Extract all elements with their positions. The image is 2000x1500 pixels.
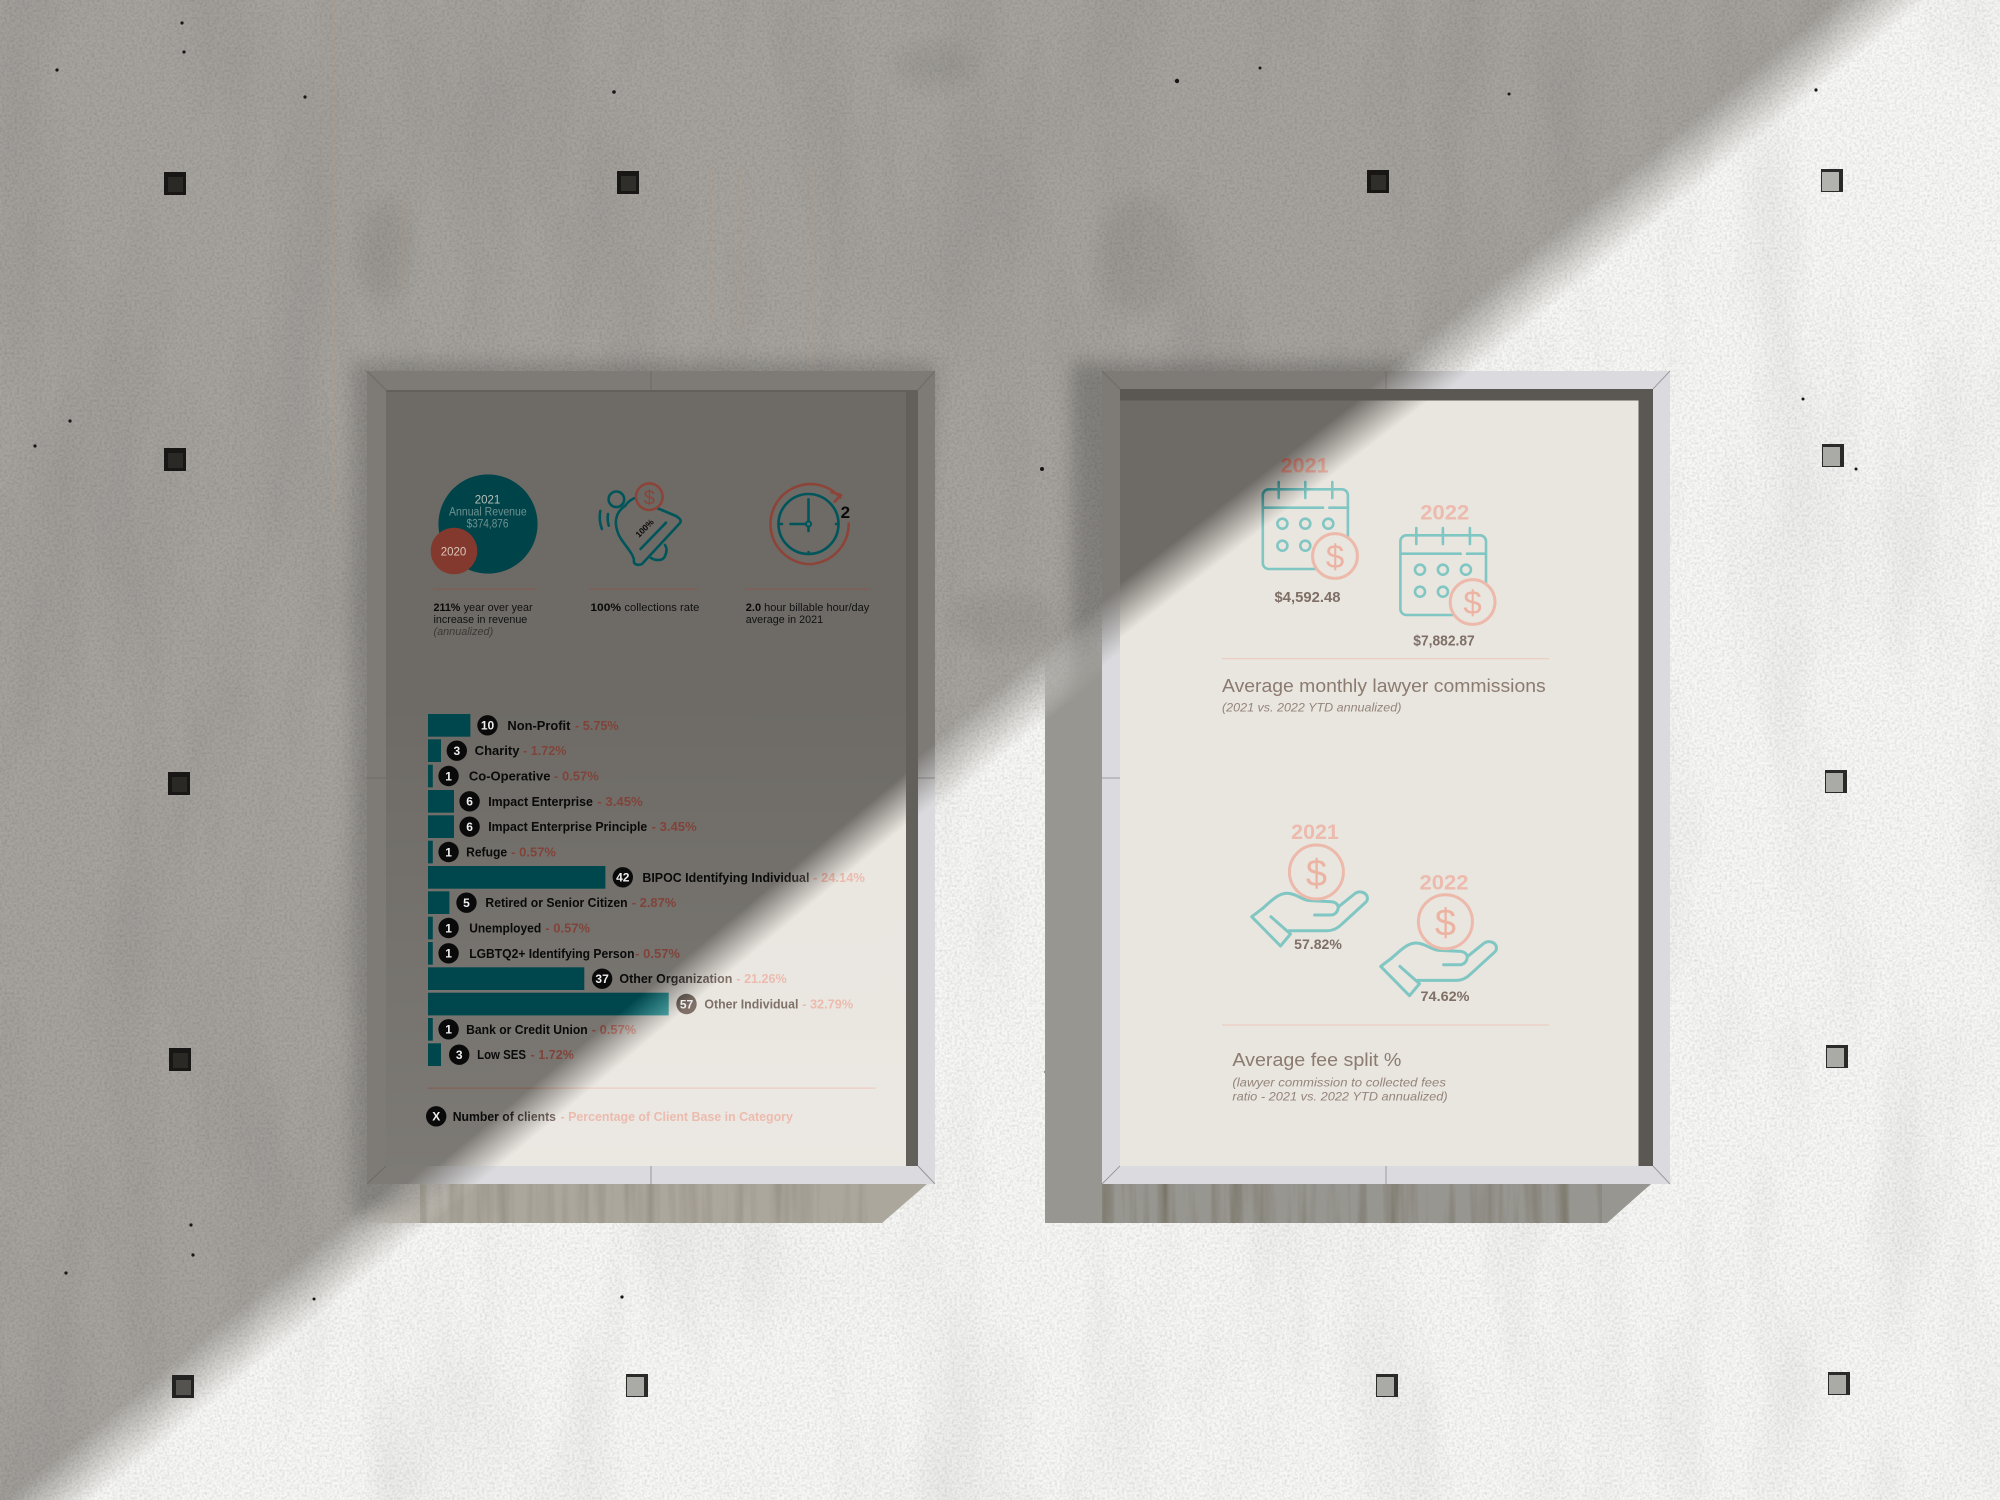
row: BIPOC Identifying Individual: 42 [616, 871, 630, 885]
caption: collections rate: collections rate [624, 602, 699, 614]
caption: revenue growth: increase in revenue [434, 614, 527, 626]
right poster paper [1120, 400, 1638, 1166]
caption: billable hours: hour billable hour/day [764, 602, 870, 614]
icon: bell with dollar [600, 483, 681, 565]
caption: billable hours: 2.0 [746, 602, 761, 614]
panel: right poster [1102, 371, 1670, 1184]
row: Impact Enterprise Principle: Impact Enterprise Principle [488, 820, 647, 834]
revenue circles: $374,876 [466, 518, 508, 530]
hand icon 2021: 57.82% [1294, 936, 1342, 952]
row: Low SES: 3 [456, 1048, 463, 1062]
cast shadows of posters on the wall [352, 362, 1651, 1223]
row: Other Individual: 57 [680, 997, 693, 1011]
row: Other Organization: - 21.26% [736, 972, 787, 986]
row: Non-Profit [428, 714, 619, 737]
calendar icon 2021: $4,592.48 [1275, 590, 1340, 606]
row: Non-Profit: Non-Profit [507, 719, 571, 733]
row: BIPOC Identifying Individual: BIPOC Identifying Individual [642, 871, 809, 885]
calendar icon 2021: 2021 [1281, 454, 1329, 478]
row: Retired or Senior Citizen: - 2.87% [632, 896, 676, 910]
row: Other Individual: - 32.79% [802, 998, 853, 1012]
calendar icon 2022: $ [1463, 584, 1482, 621]
row: Bank or Credit Union: 1 [445, 1023, 452, 1037]
hand icon 2021: 2021 [1291, 821, 1339, 844]
row: Impact Enterprise Principle [428, 815, 697, 838]
heading: average fee split: (lawyer commission to collected fees [1232, 1075, 1446, 1089]
row: Impact Enterprise [428, 790, 643, 813]
calendar icon 2022 [1400, 502, 1495, 650]
hand icon 2021: $ [1306, 853, 1327, 895]
revenue circles: 2021 [475, 494, 500, 506]
legend: - Percentage of Client Base in Category [560, 1110, 793, 1124]
row: Refuge: Refuge [466, 846, 507, 860]
row: Refuge: - 0.57% [511, 846, 556, 860]
heading: average monthly lawyer commissions: (2021 vs. 2022 YTD annualized) [1222, 700, 1401, 714]
revenue circles: 2020 [441, 546, 466, 558]
caption: billable hours: average in 2021 [746, 614, 823, 626]
row: Refuge: 1 [445, 845, 452, 859]
row: Other Organization: Other Organization [619, 972, 732, 986]
row: Co-Operative: Co-Operative [469, 770, 551, 784]
legend [426, 1088, 876, 1127]
revenue circles [431, 474, 538, 574]
row: Other Organization [428, 967, 787, 990]
row: Retired or Senior Citizen: 5 [463, 896, 470, 910]
bar chart: client base categories [428, 714, 865, 1066]
row: Other Individual [428, 993, 853, 1015]
calendar icon 2022: $7,882.87 [1413, 634, 1475, 650]
legend: X [432, 1110, 440, 1124]
caption: billable hours [745, 589, 870, 626]
row: Unemployed: Unemployed [469, 922, 541, 936]
caption: revenue growth: 211% [434, 602, 461, 614]
row: Impact Enterprise: 6 [466, 795, 473, 809]
row: BIPOC Identifying Individual: - 24.14% [813, 871, 865, 885]
caption: collections rate: 100% [590, 602, 621, 614]
row: BIPOC Identifying Individual [428, 866, 865, 889]
row: Co-Operative: - 0.57% [554, 770, 599, 784]
heading: average monthly lawyer commissions [1222, 658, 1549, 714]
row: Impact Enterprise Principle: 6 [466, 820, 473, 834]
row: Low SES [428, 1043, 574, 1066]
caption: revenue growth [434, 589, 536, 638]
calendar icon 2021: $ [1326, 538, 1344, 575]
calendar icon 2022: 2022 [1420, 502, 1469, 524]
row: Other Organization: 37 [595, 972, 609, 986]
left poster frame [367, 371, 935, 1184]
heading: average fee split [1222, 1024, 1549, 1103]
hand icon 2022: $ [1435, 903, 1456, 945]
revenue circles: Annual Revenue [449, 506, 527, 518]
wall tie holes [164, 169, 1850, 1398]
calendar icon 2021 [1263, 454, 1357, 606]
heading: average fee split: Average fee split % [1232, 1050, 1401, 1070]
left poster paper [386, 392, 906, 1166]
hand icon 2022: 74.62% [1420, 988, 1470, 1004]
row: Bank or Credit Union: - 0.57% [592, 1023, 636, 1037]
row: Unemployed [428, 917, 590, 939]
heading: average monthly lawyer commissions: Average monthly lawyer commissions [1222, 676, 1546, 696]
row: Unemployed: 1 [445, 921, 452, 935]
row: Impact Enterprise: Impact Enterprise [488, 795, 593, 809]
row: Refuge [428, 841, 556, 863]
row: LGBTQ2+ Identifying Person [428, 942, 680, 965]
row: Co-Operative [428, 765, 599, 787]
legend: Number of clients [453, 1110, 556, 1124]
row: Impact Enterprise Principle: - 3.45% [652, 820, 697, 834]
row: Charity [428, 739, 566, 762]
caption: revenue growth: (annualized) [434, 626, 494, 638]
right poster inner recess [1120, 389, 1653, 1166]
row: Unemployed: - 0.57% [545, 922, 590, 936]
icon: bell with dollar: 100% [633, 517, 656, 539]
row: Retired or Senior Citizen: Retired or Senior Citizen [485, 896, 628, 910]
right poster frame [1102, 371, 1670, 1184]
caption: revenue growth: year over year [464, 602, 533, 614]
icon: clock with arrow: 2 [841, 503, 850, 522]
hand icon 2022: 2022 [1420, 872, 1468, 894]
row: Non-Profit: 10 [481, 719, 494, 733]
row: LGBTQ2+ Identifying Person: 1 [445, 947, 452, 961]
hand icon 2022 [1381, 872, 1496, 1004]
row: Co-Operative: 1 [445, 769, 452, 783]
row: Bank or Credit Union [428, 1018, 636, 1041]
row: Impact Enterprise: - 3.45% [597, 795, 643, 809]
icon: clock with arrow [770, 484, 850, 564]
icon: bell with dollar: $ [644, 488, 655, 510]
panel: left poster [367, 371, 935, 1184]
row: Bank or Credit Union: Bank or Credit Union [466, 1023, 588, 1037]
row: Low SES: Low SES [477, 1048, 526, 1062]
row: Charity: - 1.72% [523, 744, 566, 758]
left poster inner recess [386, 390, 918, 1166]
row: Charity: 3 [453, 744, 460, 758]
row: Other Individual: Other Individual [704, 998, 798, 1012]
row: LGBTQ2+ Identifying Person: - 0.57% [635, 947, 680, 961]
row: Charity: Charity [475, 744, 520, 758]
hand icon 2021 [1252, 821, 1367, 952]
heading: average fee split: ratio - 2021 vs. 2022 YTD annualized) [1232, 1089, 1448, 1103]
row: Retired or Senior Citizen [428, 891, 676, 914]
caption: collections rate [589, 589, 699, 614]
row: Low SES: - 1.72% [530, 1048, 574, 1062]
row: Non-Profit: - 5.75% [575, 719, 619, 733]
row: LGBTQ2+ Identifying Person: LGBTQ2+ Identifying Person [469, 947, 634, 961]
